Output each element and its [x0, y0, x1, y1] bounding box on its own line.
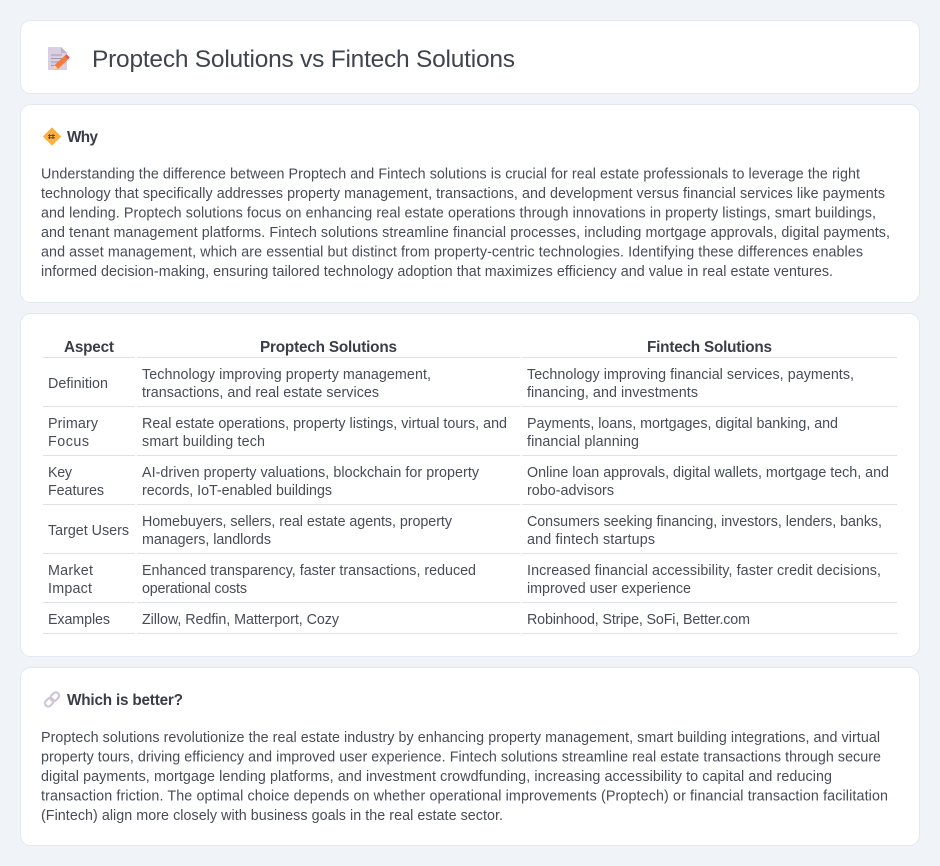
panel: title header [20, 20, 920, 94]
table row: examples: Examples [48, 612, 110, 628]
table row: primary focus [48, 416, 838, 450]
heading: why: Why [67, 129, 98, 146]
table row: target users: and fintech startups [527, 532, 655, 548]
table row: market impact: Impact [48, 581, 92, 597]
table row: primary focus: financial planning [527, 434, 639, 450]
text block: which is better paragraph: Proptech solutions revolutionize the real estate industry by enhancing property management, smart building integrations, and virtual [41, 730, 880, 746]
table row: definition: transactions, and real estate services [142, 385, 379, 401]
table row: target users: Consumers seeking financing, investors, lenders, banks, [527, 514, 882, 530]
table row: examples [48, 612, 750, 628]
text block: which is better paragraph [41, 730, 888, 824]
table row: target users: Target Users [48, 523, 129, 539]
table row: market impact: Enhanced transparency, faster transactions, reduced [142, 563, 476, 579]
table row: key features: records, IoT-enabled buildings [142, 483, 332, 499]
table row: market impact: Market [48, 563, 93, 579]
text block: why paragraph: technology that specifically addresses property management, transactions, and development versus financial services like payments [41, 186, 885, 202]
table row: key features: Key [48, 465, 73, 481]
table row: key features: AI-driven property valuations, blockchain for property [142, 465, 480, 481]
table header: Proptech Solutions [260, 339, 397, 356]
heading: which is better: Which is better? [67, 692, 183, 709]
table row: market impact: improved user experience [527, 581, 691, 597]
text block: why paragraph [41, 166, 890, 280]
table row: definition: financing, and investments [527, 385, 698, 401]
table row: primary focus: Payments, loans, mortgages, digital banking, and [527, 416, 838, 432]
text block: which is better paragraph: (Fintech) align more closely with business goals in the real estate sector. [41, 808, 503, 824]
text block: why paragraph: Understanding the difference between Proptech and Fintech solutions is crucial for real estate professionals to leverage the right [41, 166, 860, 182]
icon: link [44, 691, 60, 708]
table row: primary focus: Focus [48, 434, 89, 450]
table row: target users: managers, landlords [142, 532, 271, 548]
table row: definition: Technology improving financial services, payments, [527, 367, 854, 383]
table row: definition: Definition [48, 376, 108, 392]
table header: Aspect [64, 339, 114, 356]
table header: Fintech Solutions [647, 339, 772, 356]
text block: why paragraph: and asset management, which are essential but distinct from property-centric technologies. Identifying these differences enables [41, 244, 863, 260]
text block: which is better paragraph: digital payments, mortgage lending platforms, and investment crowdfunding, increasing accessibility to capital and reducing [41, 769, 832, 785]
panel: comparison table [20, 314, 920, 656]
table row: primary focus: smart building tech [142, 434, 265, 450]
table row: examples: Robinhood, Stripe, SoFi, Better.com [527, 612, 750, 628]
table row: primary focus: Primary [48, 416, 99, 432]
title: Proptech Solutions vs Fintech Solutions [92, 46, 515, 73]
table row: definition [48, 367, 854, 401]
icon: warning diamond [44, 128, 60, 145]
table row: target users: Homebuyers, sellers, real estate agents, property [142, 514, 453, 530]
table row: key features: Features [48, 483, 104, 499]
table row: examples: Zillow, Redfin, Matterport, Cozy [142, 612, 340, 628]
table row: target users [48, 514, 882, 548]
table row: definition: Technology improving property management, [142, 367, 431, 383]
table row: key features: robo-advisors [527, 483, 614, 499]
text block: why paragraph: and lending. Proptech solutions focus on enhancing real estate operations through innovations in property listings, smart buildings, [41, 206, 876, 222]
text block: why paragraph: informed decision-making, ensuring tailored technology adoption that maximizes efficiency and value in real estate ventures. [41, 264, 833, 280]
table row: market impact [48, 563, 881, 597]
table row: market impact: Increased financial accessibility, faster credit decisions, [527, 563, 881, 579]
table row: primary focus: Real estate operations, property listings, virtual tours, and [142, 416, 507, 432]
icon: document with pencil [48, 47, 70, 70]
panel: why [20, 104, 920, 302]
panel: which is better [20, 668, 920, 846]
text block: why paragraph: and tenant management platforms. Fintech solutions streamline financial processes, including mortgage approvals, digital payments, [41, 225, 890, 241]
table row: key features [48, 465, 889, 499]
text block: which is better paragraph: property tours, driving efficiency and improved user experience. Fintech solutions streamline real estate transactions through secure [41, 750, 881, 766]
table row: market impact: operational costs [142, 581, 247, 597]
text block: which is better paragraph: transaction friction. The optimal choice depends on whether operational improvements (Proptech) or financial transaction facilitation [41, 788, 888, 804]
table row: key features: Online loan approvals, digital wallets, mortgage tech, and [527, 465, 889, 481]
table header [64, 339, 772, 356]
